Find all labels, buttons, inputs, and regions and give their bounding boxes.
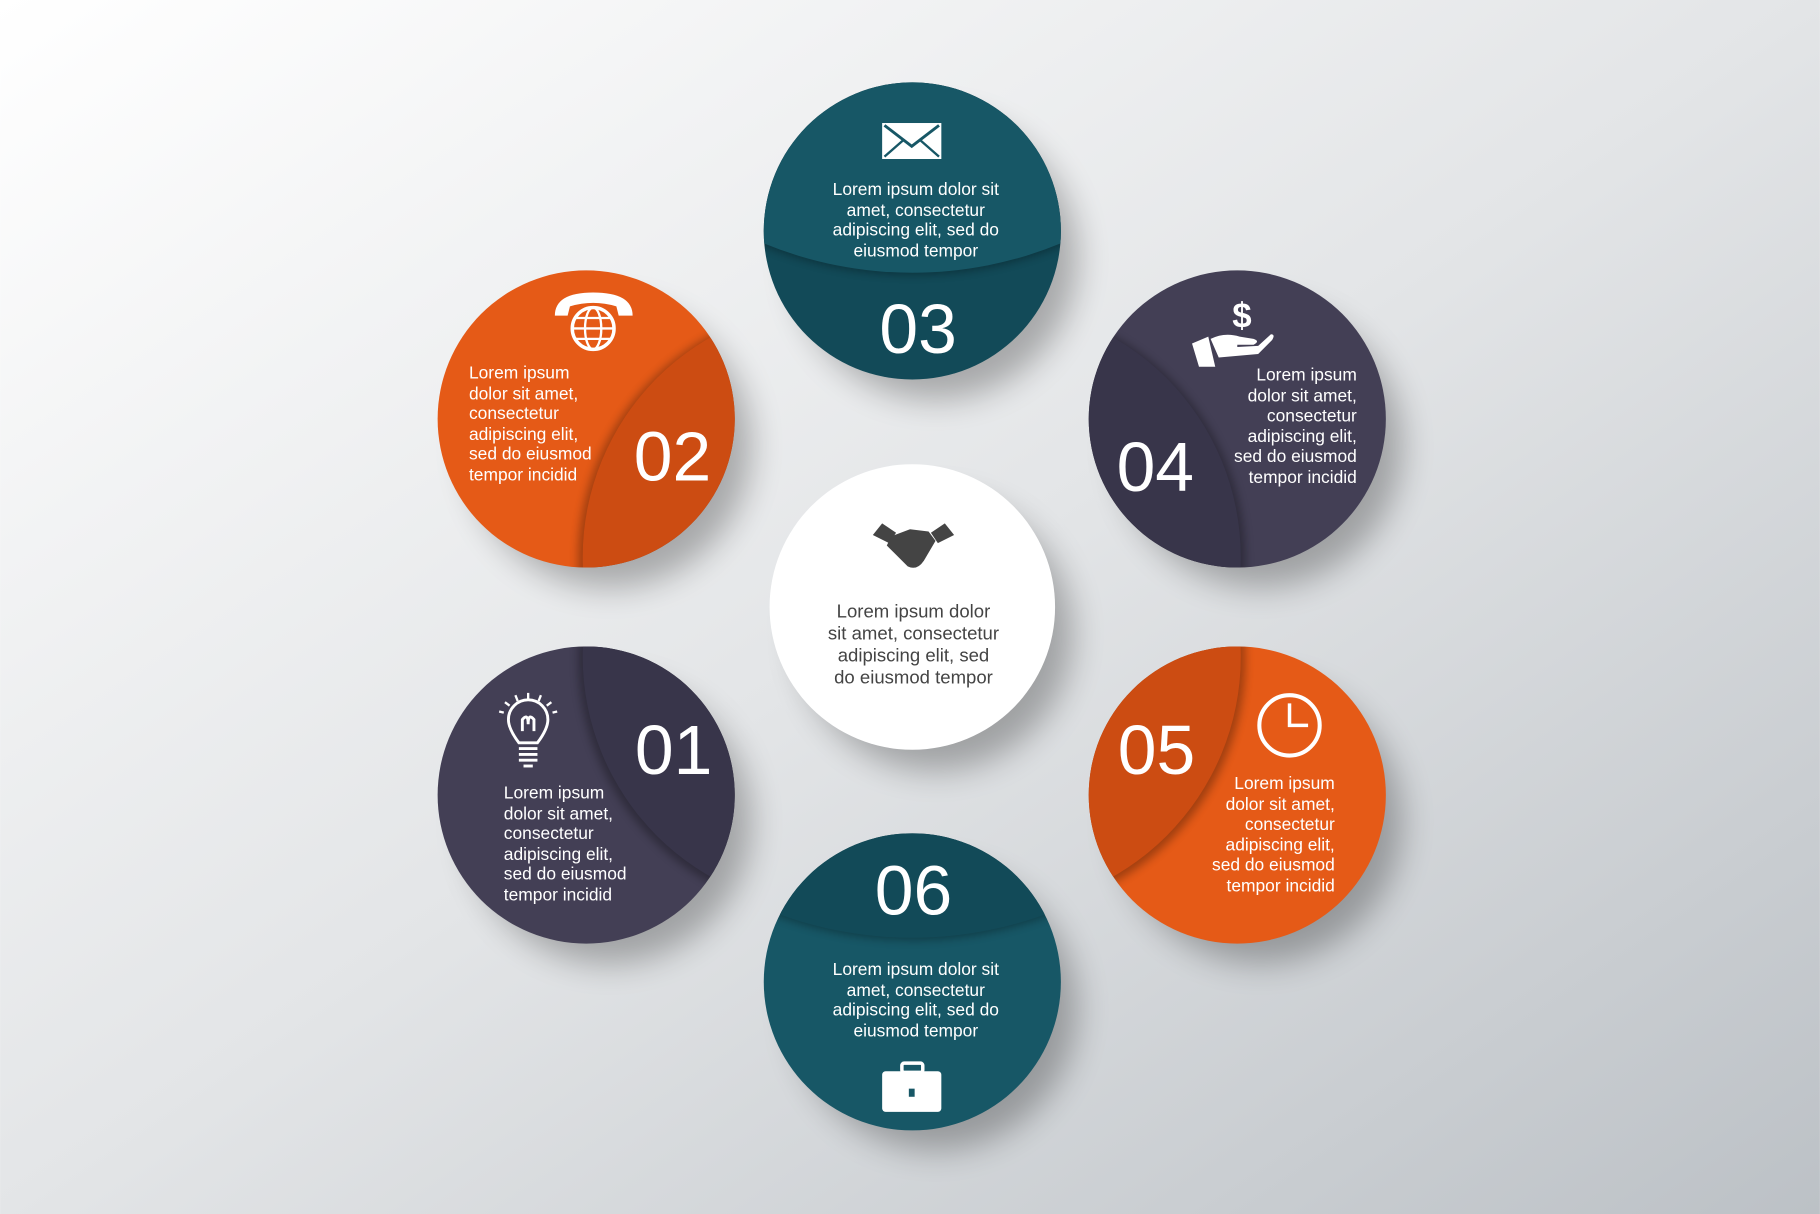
text center — [828, 600, 999, 688]
text 02: adipiscing elit, — [469, 424, 578, 444]
text 06: eiusmod tempor — [853, 1020, 978, 1040]
circle 06 — [764, 833, 1061, 1130]
text center: do eiusmod tempor — [834, 667, 993, 688]
text 04: Lorem ipsum — [1256, 365, 1357, 385]
icon: dollar hand — [1192, 296, 1274, 367]
text 01: sed do eiusmod — [504, 864, 627, 884]
icon: handshake — [873, 523, 954, 568]
text 01 — [504, 783, 627, 905]
text 05: adipiscing elit, — [1226, 835, 1335, 855]
circle 03 — [764, 82, 1061, 380]
icon: dollar hand: $ — [1232, 296, 1252, 335]
text 06: Lorem ipsum dolor sit — [833, 959, 999, 979]
text 02: dolor sit amet, — [469, 383, 578, 403]
icon: envelope — [882, 123, 941, 159]
text 01: Lorem ipsum — [504, 783, 604, 803]
number 04: 04 — [1117, 428, 1194, 506]
text 05: dolor sit amet, — [1226, 794, 1335, 814]
text 04: adipiscing elit, — [1248, 426, 1357, 446]
text 03: eiusmod tempor — [853, 240, 978, 260]
text 06: adipiscing elit, sed do — [833, 1000, 999, 1020]
number 05: 05 — [1118, 711, 1195, 789]
text 04: dolor sit amet, — [1248, 386, 1357, 406]
text 05: consectetur — [1245, 814, 1335, 834]
text center: Lorem ipsum dolor — [837, 600, 990, 621]
text 01: tempor incidid — [504, 885, 612, 905]
text 01: adipiscing elit, — [504, 844, 613, 864]
text 03: adipiscing elit, sed do — [833, 220, 999, 240]
text 03: Lorem ipsum dolor sit — [833, 179, 999, 199]
text 04: tempor incidid — [1249, 467, 1357, 487]
icon: phone globe — [555, 292, 633, 349]
icon: light bulb — [499, 693, 557, 766]
text 02 — [469, 362, 592, 484]
text 02: tempor incidid — [469, 464, 577, 484]
text 06: amet, consectetur — [847, 980, 985, 1000]
text 01: consectetur — [504, 823, 594, 843]
text 05: sed do eiusmod — [1212, 854, 1335, 874]
icon: briefcase — [882, 1063, 941, 1112]
circle 02 — [438, 270, 735, 568]
text 04 — [1234, 365, 1357, 487]
text 04: sed do eiusmod — [1234, 446, 1357, 466]
center circle — [770, 464, 1055, 750]
number 02: 02 — [634, 417, 711, 495]
number 03: 03 — [879, 290, 957, 368]
text 02: Lorem ipsum — [469, 362, 569, 382]
circle 01 — [438, 646, 735, 944]
text 05: Lorem ipsum — [1234, 773, 1335, 793]
circle 04 — [1088, 270, 1386, 568]
text 02: sed do eiusmod — [469, 444, 592, 464]
text 04: consectetur — [1267, 405, 1357, 425]
text center: sit amet, consectetur — [828, 622, 999, 643]
number 06: 06 — [875, 852, 952, 930]
text 03: amet, consectetur — [847, 200, 985, 220]
text 06 — [833, 959, 999, 1040]
text center: adipiscing elit, sed — [838, 645, 989, 666]
shadows — [468, 116, 1402, 1150]
text 05 — [1212, 773, 1335, 895]
icon: clock — [1259, 695, 1320, 756]
text 05: tempor incidid — [1227, 875, 1335, 895]
number 01: 01 — [635, 711, 712, 789]
circle 05 — [1088, 646, 1386, 944]
text 02: consectetur — [469, 403, 559, 423]
text 03 — [833, 179, 999, 260]
text 01: dolor sit amet, — [504, 803, 613, 823]
